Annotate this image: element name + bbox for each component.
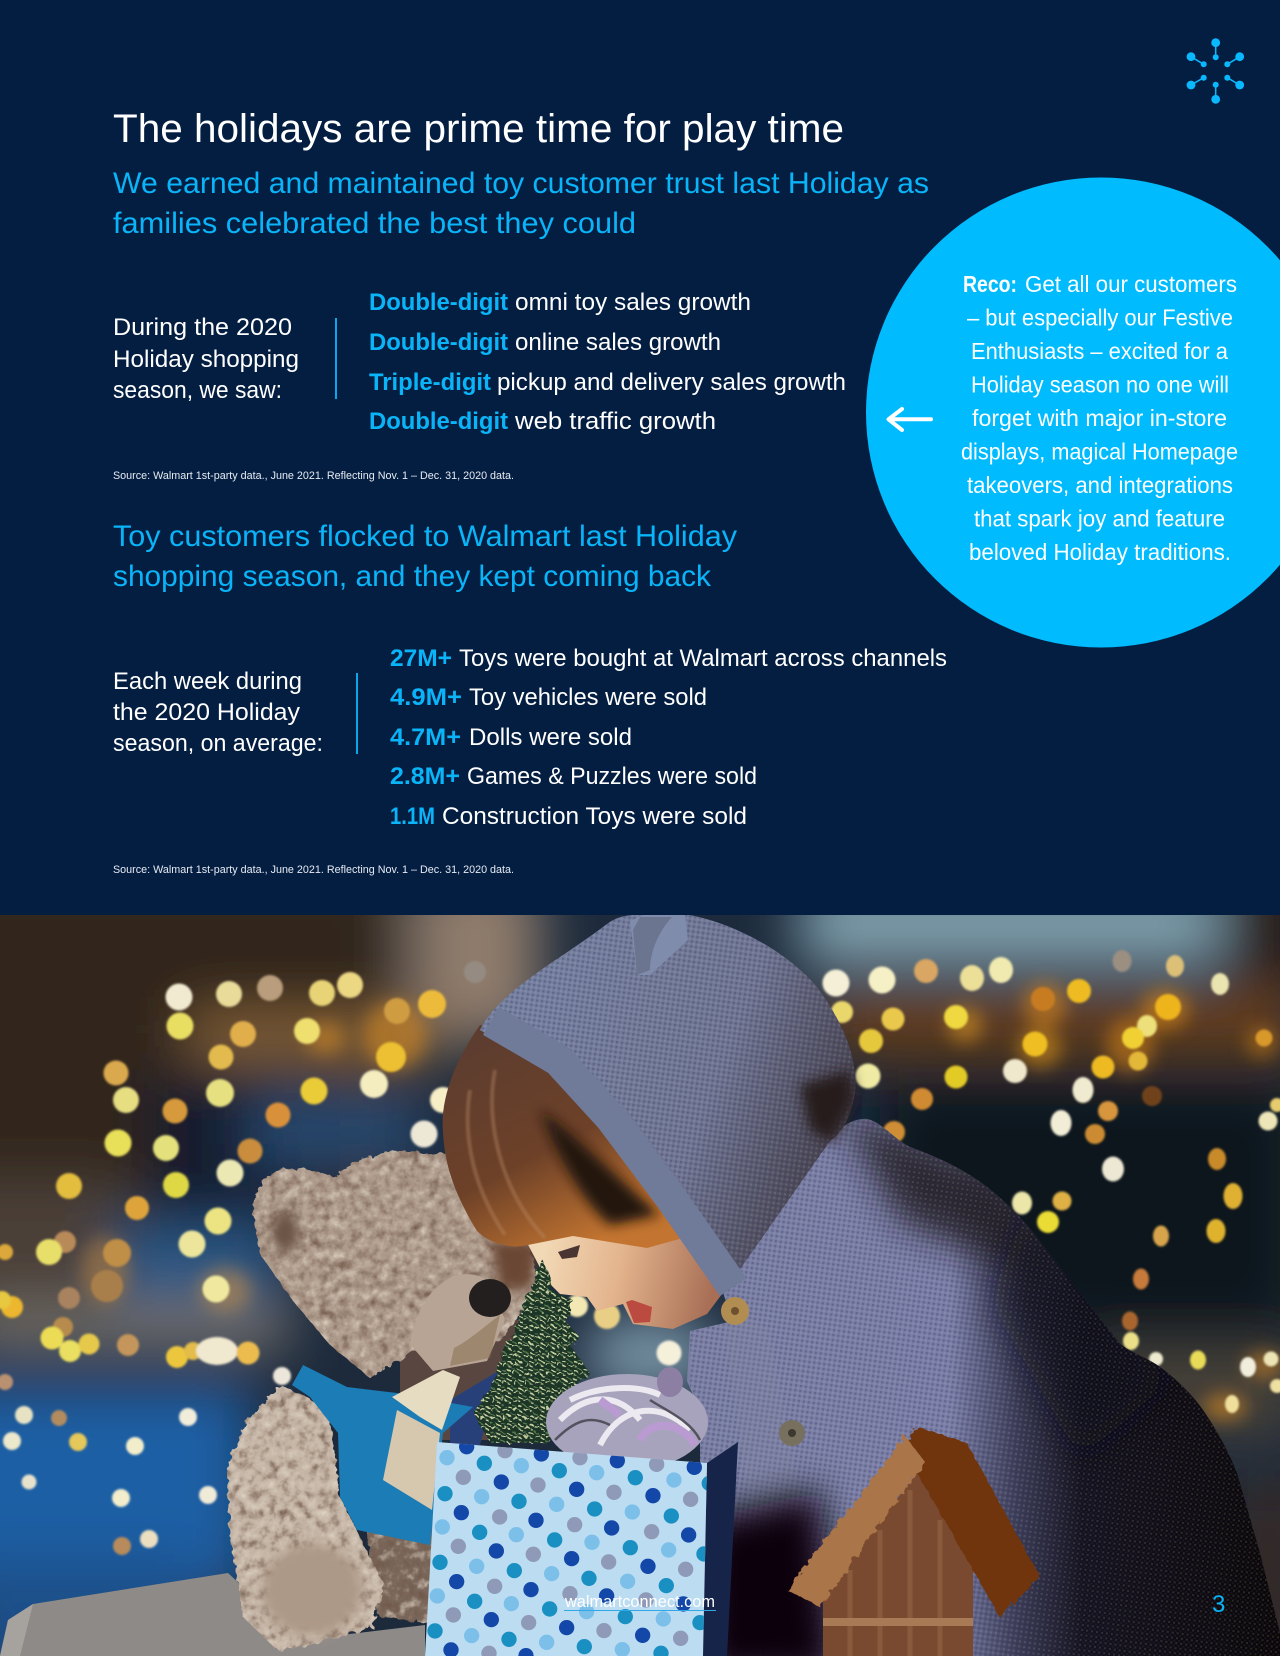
- arrow: pointing left: [888, 409, 931, 430]
- text block: each week during the 2020 holiday: Each week during: [113, 668, 302, 695]
- list: weekly toy sales: 4.7M+: [390, 724, 461, 751]
- list: weekly toy sales: Toy vehicles were sold: [469, 684, 707, 711]
- callout text: Holiday season no one will: [971, 372, 1229, 398]
- heading: earned and maintained trust: [113, 167, 929, 240]
- teddy bear: [227, 1151, 545, 1650]
- divider 1: [335, 318, 337, 399]
- list: weekly toy sales: 27M+: [390, 645, 452, 672]
- bokeh lights: right: [566, 950, 1280, 1413]
- list: growth metrics: Double-digit: [369, 289, 508, 316]
- gift box with polka dots: [425, 1439, 738, 1656]
- heading: toy customers flocked to Walmart: Toy customers flocked to Walmart last Holiday: [113, 520, 737, 553]
- heading: earned and maintained trust: We earned and maintained toy customer trust last Holiday as: [113, 167, 929, 200]
- photo: child and teddy bear opening a gift: [0, 860, 1280, 1656]
- callout text: takeovers, and integrations: [967, 472, 1233, 498]
- list: weekly toy sales: 4.9M+: [390, 684, 462, 711]
- list: growth metrics: Double-digit: [369, 408, 508, 435]
- heading: toy customers flocked to Walmart: [113, 520, 737, 593]
- list: weekly toy sales: [390, 645, 947, 830]
- source note 2: Source: Walmart 1st-party data., June 2021. Reflecting Nov. 1 – Dec. 31, 2020 data.: [113, 864, 514, 876]
- source note 1: Source: Walmart 1st-party data., June 2021. Reflecting Nov. 1 – Dec. 31, 2020 data.: [113, 470, 514, 482]
- page number: 3: [1212, 1591, 1225, 1618]
- button: lower: [779, 1420, 805, 1446]
- couch: [0, 1573, 425, 1656]
- text block: during the 2020 holiday season: Holiday shopping: [113, 346, 299, 373]
- callout text: Reco:: [963, 271, 1017, 297]
- callout text: Get all our customers: [1025, 271, 1237, 297]
- callout text: [961, 271, 1238, 565]
- text block: each week during the 2020 holiday: season, on average:: [113, 730, 323, 757]
- list: growth metrics: Triple-digit: [369, 369, 491, 396]
- list: growth metrics: pickup and delivery sales growth: [497, 369, 846, 396]
- list: weekly toy sales: 1.1M: [390, 803, 435, 830]
- bokeh lights: left: [0, 961, 486, 1555]
- miniature wooden house: [787, 1427, 1040, 1656]
- list: weekly toy sales: Toys were bought at Walmart across channels: [459, 645, 947, 672]
- glass ornament: [546, 1367, 708, 1470]
- button: upper: [721, 1297, 749, 1325]
- callout text: Enthusiasts – excited for a: [971, 338, 1228, 364]
- child hair: [442, 1025, 680, 1248]
- text block: during the 2020 holiday season: [113, 314, 299, 404]
- text block: during the 2020 holiday season: During the 2020: [113, 314, 292, 341]
- list: growth metrics: web traffic growth: [514, 408, 716, 435]
- callout text: that spark joy and feature: [974, 506, 1225, 532]
- text block: each week during the 2020 holiday: [113, 668, 323, 757]
- list: weekly toy sales: Construction Toys were sold: [442, 803, 747, 830]
- icon: Walmart spark network: [1187, 38, 1244, 104]
- list: weekly toy sales: Games & Puzzles were sold: [467, 763, 757, 790]
- divider 2: [356, 673, 358, 754]
- callout circle: recommendation: [866, 178, 1280, 648]
- title: The holidays are prime time for play time: [113, 107, 844, 151]
- heading: earned and maintained trust: families celebrated the best they could: [113, 207, 636, 240]
- list: weekly toy sales: Dolls were sold: [469, 724, 632, 751]
- light behind the box: [656, 1340, 682, 1366]
- miniature christmas tree: [473, 1259, 590, 1443]
- text block: each week during the 2020 holiday: the 2020 Holiday: [113, 699, 300, 726]
- callout text: – but especially our Festive: [967, 304, 1233, 330]
- list: growth metrics: omni toy sales growth: [515, 289, 751, 316]
- callout text: beloved Holiday traditions.: [969, 539, 1231, 565]
- hood ear: [630, 914, 688, 975]
- list: growth metrics: Double-digit: [369, 329, 508, 356]
- footer link: walmartconnect.com: [564, 1593, 715, 1611]
- child face: [528, 1236, 722, 1329]
- heading: toy customers flocked to Walmart: shopping season, and they kept coming back: [113, 560, 712, 593]
- child sweater: [687, 1110, 1280, 1656]
- text block: during the 2020 holiday season: season, we saw:: [113, 377, 282, 404]
- list: growth metrics: online sales growth: [515, 329, 721, 356]
- callout text: forget with major in-store: [972, 405, 1227, 431]
- list: growth metrics: [369, 289, 846, 435]
- child hood: [480, 914, 855, 1295]
- callout text: displays, magical Homepage: [961, 438, 1238, 464]
- bokeh glows: [81, 983, 1280, 1421]
- list: weekly toy sales: 2.8M+: [390, 763, 460, 790]
